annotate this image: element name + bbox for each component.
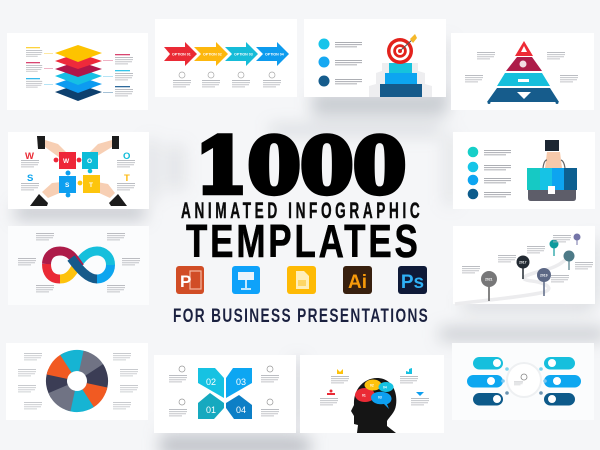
timeline pins: 2021 [485, 278, 493, 282]
timeline pins [481, 234, 580, 301]
briefcase chart [527, 168, 577, 201]
infinity loop [46, 251, 110, 279]
panel: target on steps [304, 19, 446, 97]
head captions [320, 368, 429, 405]
blue steps [380, 63, 422, 97]
brain lobes: 03 [378, 396, 382, 400]
X chart [198, 368, 252, 419]
hands [30, 136, 127, 206]
X chart: 01 [206, 405, 216, 415]
panel: timeline [453, 226, 595, 304]
icon: hand with sleeve [543, 140, 565, 168]
icon: Illustrator [343, 266, 372, 294]
SWOT letters: W [25, 151, 34, 162]
ring chart [50, 354, 104, 408]
icon: Keynote [232, 266, 260, 294]
pyramid chart [487, 41, 559, 104]
arrow row: OPTION 03 [234, 52, 253, 56]
timeline pins: 2019 [540, 274, 548, 278]
arrow row: OPTION 02 [203, 52, 222, 56]
SWOT letters: O [123, 151, 130, 162]
panel: layers [7, 33, 148, 110]
head silhouette [351, 378, 396, 433]
brain lobes [355, 380, 394, 409]
title: 1000: 1000 [195, 122, 406, 210]
layer captions [26, 47, 133, 96]
X chart: 03 [236, 377, 246, 387]
heading: animated infographic: ANIMATED INFOGRAPHIC [181, 198, 420, 223]
panel: infinity [8, 226, 149, 305]
road [455, 254, 567, 304]
puzzle pieces [54, 152, 100, 197]
right pills [539, 357, 581, 406]
timeline captions [462, 235, 593, 282]
brain lobes: 01 [362, 394, 366, 398]
X captions [169, 366, 279, 416]
icon: Photoshop [398, 266, 427, 294]
brain lobes: 02 [370, 384, 374, 388]
SWOT letters [25, 151, 130, 184]
panel: X numbered [154, 355, 296, 433]
SWOT letters: T [124, 173, 130, 184]
side steps [369, 63, 432, 97]
SWOT captions [21, 160, 135, 190]
icon: PowerPoint [176, 266, 204, 294]
arrow captions [173, 72, 281, 87]
brain lobes: 04 [383, 386, 387, 390]
option list [318, 38, 362, 86]
briefcase list [468, 147, 511, 199]
icon: Illustrator: Ai [348, 272, 367, 293]
heading: templates: TEMPLATES [186, 215, 418, 267]
panel: segmented ring [6, 343, 148, 420]
ring captions [18, 353, 138, 409]
panel: head [300, 355, 444, 433]
puzzle pieces: O [87, 158, 92, 165]
left pills [467, 357, 509, 406]
arrow row: OPTION 04 [265, 52, 284, 56]
layered stack chart [55, 45, 102, 101]
panel: ovals [452, 343, 594, 420]
X chart: 02 [206, 377, 216, 387]
infinity captions [18, 233, 140, 292]
panel: SWOT puzzle [8, 132, 149, 209]
pyramid captions [465, 52, 578, 82]
puzzle pieces: T [89, 182, 93, 189]
subtitle: FOR BUSINESS PRESENTATIONS [173, 305, 428, 327]
arrow row [164, 42, 289, 66]
icon: PowerPoint: P [180, 272, 191, 291]
puzzle pieces: S [65, 182, 70, 189]
arrow row: OPTION 01 [172, 52, 191, 56]
panel: briefcase [453, 132, 595, 209]
icon: Google Slides [287, 266, 316, 294]
panel: pyramid [451, 33, 594, 110]
puzzle pieces: W [63, 158, 70, 165]
center circle [507, 363, 541, 397]
panel: arrows [155, 19, 297, 97]
X chart: 04 [236, 405, 246, 415]
icon: target with arrow [387, 34, 417, 64]
icon: Photoshop: Ps [401, 272, 424, 293]
SWOT letters: S [27, 173, 33, 184]
timeline pins: 2017 [519, 260, 527, 264]
